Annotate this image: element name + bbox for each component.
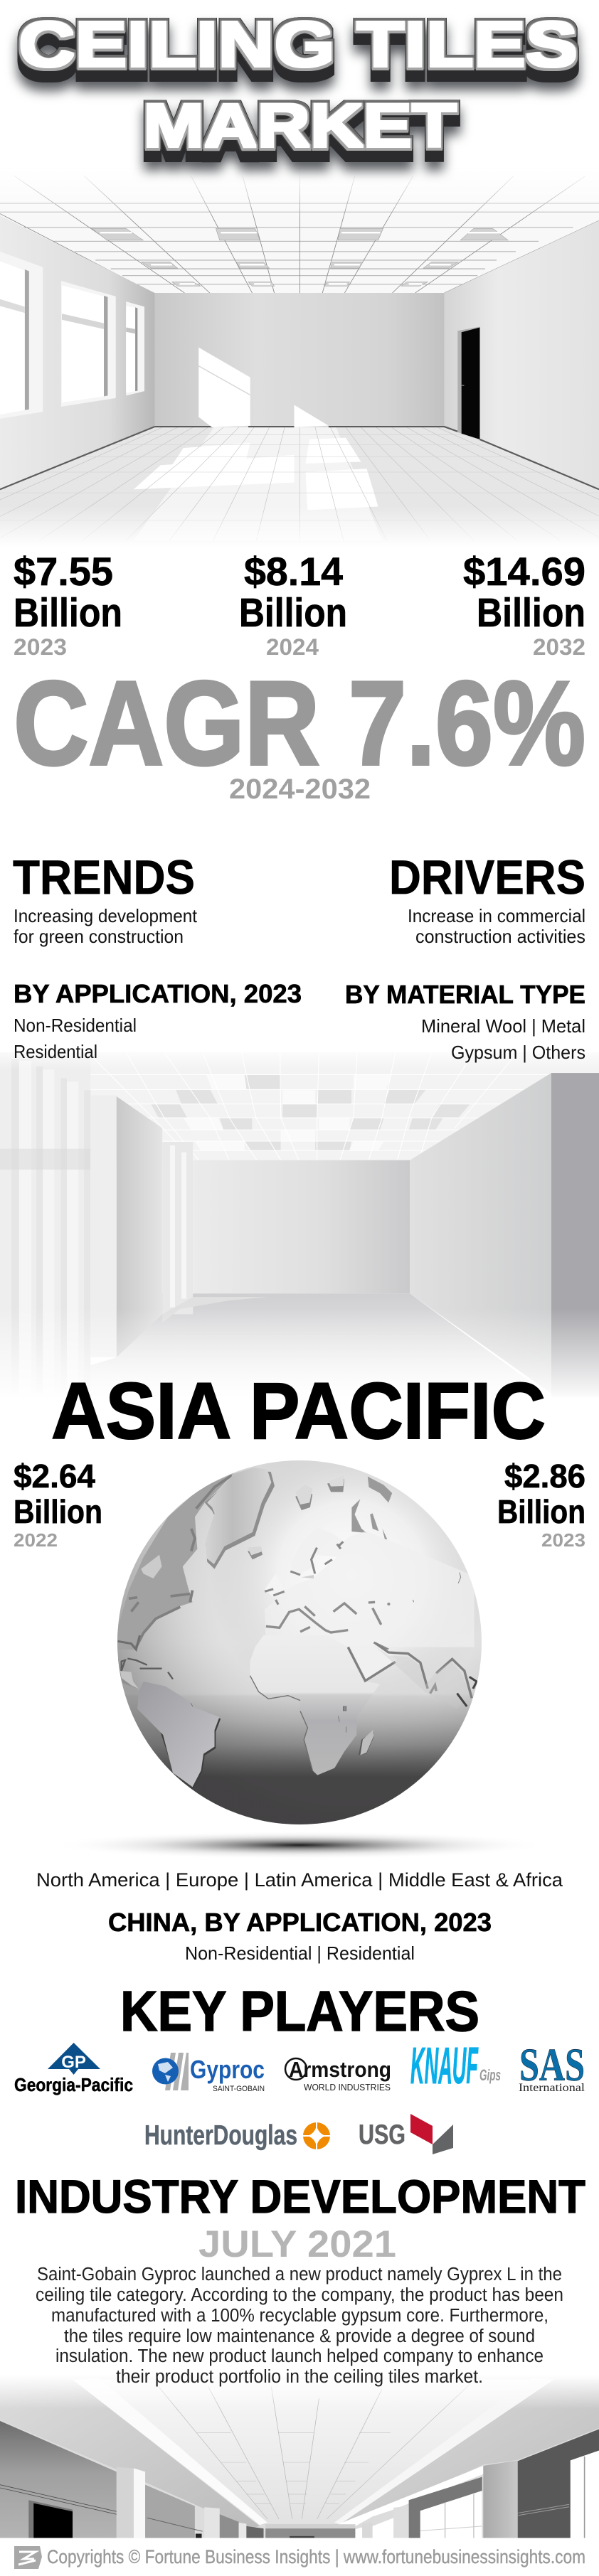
back wall	[193, 1160, 410, 1293]
logo: Georgia-Pacific: Georgia-Pacific	[14, 2074, 133, 2095]
stat: Asia Pacific 2023	[497, 1458, 585, 1551]
far end	[265, 2524, 355, 2538]
left soffit and wall	[0, 2378, 267, 2538]
globe shadow	[51, 1831, 548, 1859]
logo: Hunter Douglas: HunterDouglas	[144, 2120, 297, 2151]
CAGR: 2024-2032	[229, 774, 371, 805]
stat: 2024 market size: $8.14	[244, 549, 343, 594]
title	[18, 9, 578, 160]
China by application: CHINA, BY APPLICATION, 2023	[108, 1908, 492, 1937]
logo: Gyproc: Gyproc	[190, 2055, 265, 2084]
icon: globe	[114, 1460, 482, 1824]
left pillar	[90, 1096, 162, 1357]
regions list: North America | Europe | Latin America | Middle East & Africa	[36, 1869, 563, 1891]
development description: Saint-Gobain Gyproc launched a new product namely Gyprex L in the	[37, 2265, 562, 2284]
logo: Armstrong	[285, 2057, 391, 2093]
logo: SAS International: International	[519, 2082, 585, 2094]
development date: JULY 2021	[198, 2223, 396, 2265]
drivers: Increase in commercial	[408, 905, 585, 926]
inner slats	[162, 1142, 267, 1322]
development description: the tiles require low maintenance & provide a degree of sound	[64, 2326, 535, 2346]
trends: for green construction	[14, 926, 184, 947]
logo: Armstrong: Armstrong	[289, 2057, 391, 2082]
stat: Asia Pacific 2022: $2.64	[14, 1458, 95, 1495]
by material type: BY MATERIAL TYPE	[345, 980, 585, 1009]
logo: Georgia-Pacific: GP	[61, 2053, 86, 2072]
stat: Asia Pacific 2023: $2.86	[504, 1458, 585, 1495]
sunlight on back wall	[198, 348, 329, 427]
stat: 2032 market size: $14.69	[463, 549, 585, 594]
logo: Knauf Gips: Gips	[479, 2066, 501, 2084]
stat: Asia Pacific 2022: Billion	[14, 1493, 102, 1530]
ceiling centre	[0, 2375, 599, 2538]
logo: Georgia-Pacific	[14, 2043, 133, 2095]
illustration: empty office room with suspended ceiling	[0, 169, 599, 548]
stat: Asia Pacific 2022	[14, 1458, 102, 1551]
by material type	[345, 980, 585, 1063]
stat: Asia Pacific 2022: 2022	[14, 1529, 58, 1551]
logo: Gyproc: SAINT-GOBAIN	[213, 2085, 265, 2093]
development description: their product portfolio in the ceiling tiles market.	[116, 2367, 483, 2387]
stat: 2024 market size: Billion	[239, 590, 347, 636]
right wall	[445, 220, 599, 489]
by application: Residential	[14, 1041, 97, 1062]
drivers: construction activities	[415, 926, 585, 947]
left blinds	[0, 1052, 90, 1397]
by application	[14, 979, 302, 1062]
footer logo	[14, 2546, 42, 2569]
trends: TRENDS	[13, 850, 195, 904]
stat: Asia Pacific 2023: 2023	[541, 1529, 585, 1551]
stat: 2023 market size: Billion	[14, 590, 122, 636]
heading: Asia Pacific: ASIA PACIFIC	[51, 1367, 546, 1455]
trends: Increasing development	[14, 905, 198, 926]
stat: Asia Pacific 2023: Billion	[497, 1493, 585, 1530]
left wall	[0, 215, 154, 489]
development description	[36, 2265, 563, 2387]
China by application	[108, 1908, 492, 1964]
stat: 2024 market size: 2024	[266, 634, 319, 660]
stat: 2023 market size: $7.55	[14, 549, 113, 594]
windows	[0, 252, 144, 419]
development description: ceiling tile category. According to the company, the product has been	[36, 2285, 563, 2305]
northern land masses	[114, 1468, 475, 1650]
door	[457, 326, 479, 439]
logo: Gyproc	[152, 2053, 265, 2093]
China by application: Non-Residential | Residential	[185, 1942, 415, 1964]
development description: manufactured with a 100% recyclable gypsum core. Furthermore,	[51, 2306, 548, 2326]
right soffit and wall	[334, 2378, 599, 2538]
stat: 2023 market size	[14, 549, 122, 660]
by material type: Gypsum | Others	[451, 1042, 585, 1063]
title: MARKET	[143, 92, 457, 160]
trends	[13, 850, 198, 947]
logo: Armstrong: WORLD INDUSTRIES	[304, 2082, 391, 2093]
floor	[0, 1293, 551, 1397]
by application: BY APPLICATION, 2023	[14, 979, 302, 1008]
title: CEILING TILES	[18, 9, 578, 80]
southern land masses	[117, 1635, 477, 1789]
heading: key players: KEY PLAYERS	[120, 1979, 479, 2043]
stat: 2032 market size: 2032	[533, 634, 585, 660]
by material type: Mineral Wool | Metal	[421, 1015, 585, 1037]
drivers: DRIVERS	[389, 850, 585, 904]
stat: 2024 market size	[239, 549, 347, 660]
ceiling	[0, 169, 599, 293]
right wall	[410, 1073, 551, 1394]
logo: Knauf Gips: KNAUF	[410, 2038, 479, 2095]
stat: 2032 market size: Billion	[477, 590, 585, 636]
drivers	[389, 850, 585, 947]
ceiling tiles	[0, 1052, 599, 1163]
logo: USG	[359, 2114, 453, 2154]
right column	[551, 1073, 599, 1397]
baseboards	[0, 427, 599, 489]
back wall	[154, 293, 445, 427]
stat: 2023 market size: 2023	[14, 634, 67, 660]
logo: Knauf Gips	[410, 2038, 501, 2095]
illustration: corridor ceiling	[0, 2375, 599, 2538]
stat: 2032 market size	[463, 549, 585, 660]
by application: Non-Residential	[14, 1015, 137, 1036]
floor	[0, 427, 599, 548]
development description: insulation. The new product launch helped company to enhance	[55, 2346, 544, 2366]
illustration: white room with tiled ceiling	[0, 1052, 599, 1397]
logo: USG: USG	[359, 2120, 405, 2150]
